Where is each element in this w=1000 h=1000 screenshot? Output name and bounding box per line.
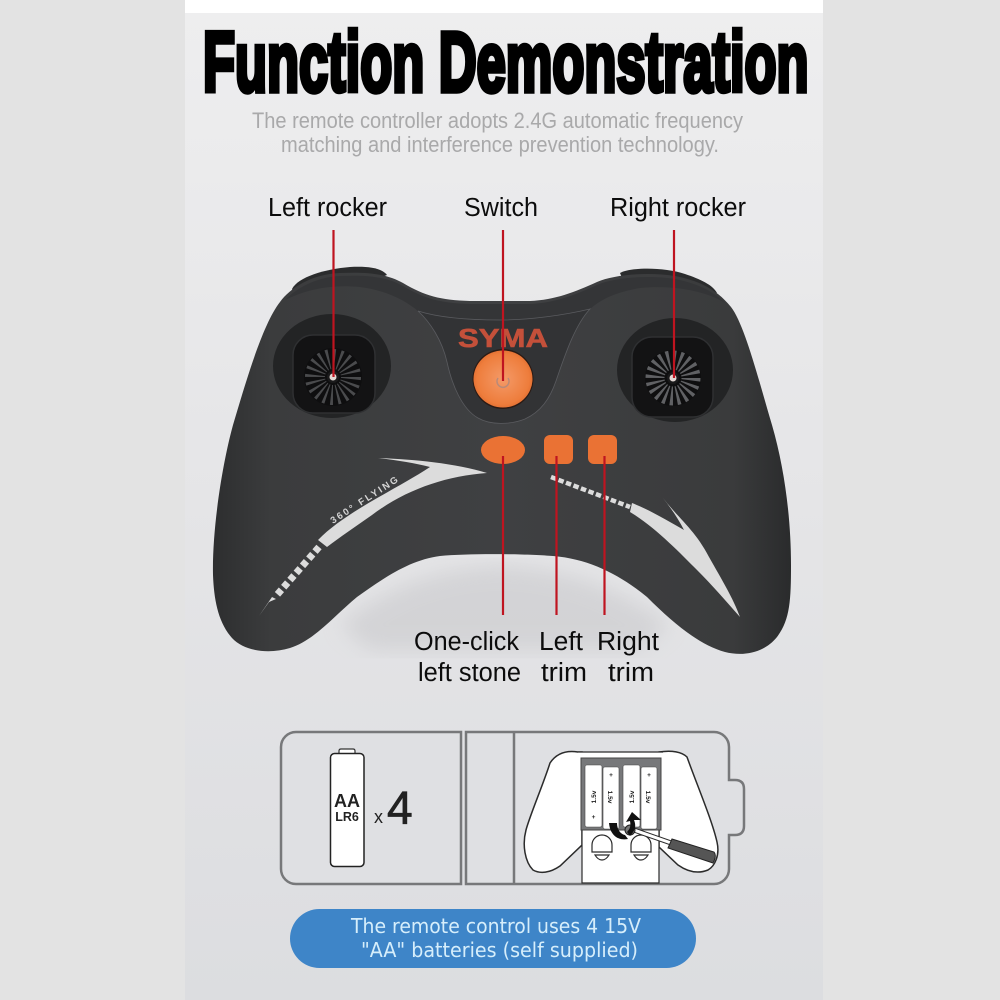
screwdriver: [625, 825, 715, 863]
callout labels: Left: [539, 628, 583, 656]
multiplier x 4: x: [374, 807, 383, 827]
multiplier x 4: 4: [387, 782, 413, 834]
subtitle: matching and interference prevention technology.: [281, 132, 719, 157]
left trim button: [544, 435, 573, 464]
battery cell labels: 1.5v: [606, 791, 613, 804]
door latch circles: [592, 835, 651, 860]
controller: [213, 267, 791, 654]
callout labels: left stone: [418, 659, 521, 687]
battery cell labels: +: [609, 772, 613, 779]
left bumper: [292, 267, 387, 295]
blue caption pill: The remote control uses 4 15V: [350, 914, 641, 938]
one-click button: [481, 436, 525, 464]
icon: AA battery: [330, 749, 364, 866]
SYMA logo: SYMA: [458, 323, 548, 353]
blue caption pill: "AA" batteries (self supplied): [361, 938, 638, 962]
top rim band: [285, 276, 725, 320]
callout labels: trim: [608, 659, 654, 687]
compartment: [581, 758, 661, 830]
callout labels: Right: [597, 628, 659, 656]
title: Function Demonstration: [203, 15, 809, 109]
controller battery diagram: [524, 751, 718, 883]
right stick housing: [617, 318, 733, 422]
right trim button: [588, 435, 617, 464]
outline of controller: [524, 751, 718, 872]
battery cell labels: +: [592, 814, 596, 821]
right bumper: [620, 269, 717, 298]
callout labels: trim: [541, 659, 587, 687]
subtitle: [252, 108, 743, 157]
callout labels: Switch: [464, 194, 538, 222]
battery cell labels: [591, 772, 651, 821]
battery cell labels: 1.5v: [591, 790, 598, 803]
center panel: [418, 309, 590, 423]
left stick housing: [273, 314, 391, 418]
controller body: [213, 273, 791, 654]
switch button: [472, 349, 534, 409]
icon: AA battery: AA: [334, 791, 360, 811]
blue caption pill: [290, 909, 696, 968]
callout labels: Left rocker: [268, 194, 387, 222]
callout labels: Right rocker: [610, 194, 746, 222]
label: 360 flying: 360° FLYING: [329, 473, 402, 527]
battery door: [582, 825, 659, 883]
battery cell labels: 1.5v: [644, 791, 651, 804]
battery panel: right: [466, 732, 744, 884]
rotation arrow: [609, 812, 641, 839]
icon: AA battery: LR6: [335, 810, 359, 824]
right swoosh: [551, 477, 740, 617]
battery cells: [585, 765, 657, 829]
callout labels: One-click: [414, 628, 519, 656]
subtitle: The remote controller adopts 2.4G automatic frequency: [252, 108, 743, 133]
left swoosh: [259, 458, 487, 616]
controller shadow: [340, 566, 670, 650]
battery cell labels: +: [647, 772, 651, 779]
multiplier x 4: [374, 782, 413, 834]
battery cell labels: 1.5v: [629, 790, 636, 803]
callout lines: [334, 230, 674, 615]
battery panel: left: [281, 732, 461, 884]
callout labels: [268, 194, 746, 687]
